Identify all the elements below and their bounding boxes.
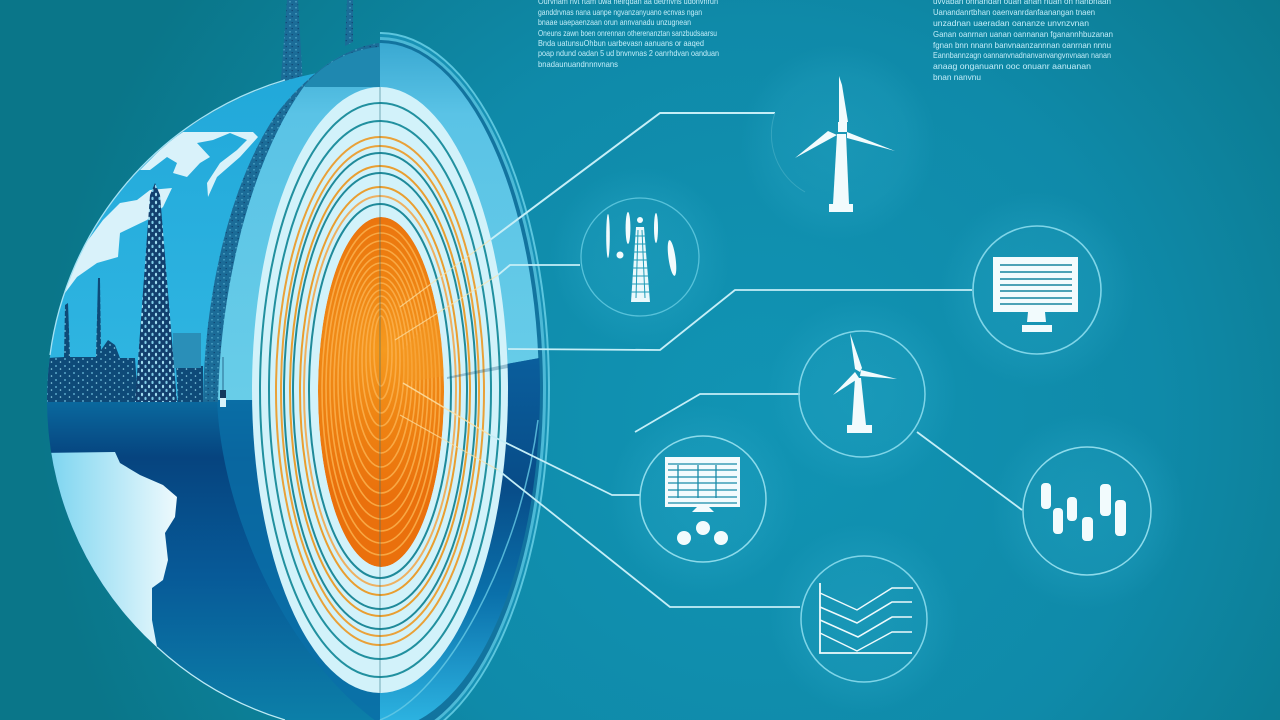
text block: left paragraph bbox=[538, 0, 719, 69]
lower right rim highlight bbox=[380, 420, 538, 720]
lattice tower bbox=[135, 183, 177, 402]
text block: right paragraph: Eannbannzagn oannanvnadnanvanvangvnvnaan nanan bbox=[933, 50, 1111, 60]
text block: left paragraph: Oneuns zawn boen onrennan otherenanztan sanzbudsaarsu bbox=[538, 28, 717, 38]
text block: right paragraph: anaag onganuann ooc onuanr aanuanan bbox=[933, 61, 1091, 71]
text block: left paragraph: ganddrvnas nana uanpe ngvanzanyuano ecnvas ngan bbox=[538, 7, 702, 17]
right rim arcs bbox=[380, 32, 550, 720]
lower inner shell bbox=[217, 400, 380, 720]
centre seam bbox=[379, 87, 381, 693]
orange core bbox=[318, 217, 450, 567]
text block: right paragraph: Uanandanrtbhan oaenvanrdanfaanangan tnaen bbox=[933, 7, 1095, 17]
text block: right paragraph: unzadnan uaeradan oananze unvnzvnan bbox=[933, 18, 1089, 28]
upper left face bbox=[217, 83, 380, 400]
icon: wind turbine large bbox=[771, 76, 895, 212]
text block: right paragraph: Ganan oanrnan uanan oannanan fganannhbuzanan bbox=[933, 29, 1113, 39]
wedge shadow bbox=[447, 364, 508, 379]
lower right face bbox=[380, 358, 540, 720]
upper right face bbox=[380, 43, 538, 364]
text block: right paragraph bbox=[933, 0, 1113, 82]
icon: dashboard with dots bbox=[640, 436, 766, 562]
icon: wind turbine small bbox=[799, 331, 925, 457]
globe cutaway bbox=[40, 32, 550, 720]
distant buildings bbox=[173, 333, 201, 368]
skyline bbox=[47, 278, 203, 402]
connector lines bbox=[395, 113, 1022, 607]
text block: left paragraph: Bnda uatunsuOhbun uarbevasn aanuans or aaqed bbox=[538, 38, 704, 48]
back panel bbox=[303, 43, 380, 87]
upper continents bbox=[65, 132, 258, 293]
text block: left paragraph: bnadaunuandnnnvnans bbox=[538, 59, 618, 69]
glow halos behind icons bbox=[550, 45, 1185, 714]
icon: pill markers bbox=[1023, 447, 1151, 575]
lower continent bbox=[51, 452, 177, 648]
icon: top antenna towers bbox=[280, 0, 353, 92]
lattice rim band bbox=[203, 43, 379, 402]
text block: right paragraph: bnan nanvnu bbox=[933, 72, 981, 82]
text block: left paragraph: poap ndund oadan 5 ud bnvnvnas 2 oanrhdvan oanduan bbox=[538, 48, 719, 58]
icon: line chart bbox=[801, 556, 927, 682]
left globe surface bbox=[40, 60, 380, 720]
white ring disc bbox=[252, 87, 508, 693]
small lamp bbox=[220, 357, 226, 407]
icon: transmission tower bbox=[581, 198, 699, 316]
text block: right paragraph: fgnan bnn nnann banvnaanzannnan oanrnan nnnu bbox=[933, 40, 1111, 50]
globe outline bbox=[50, 80, 285, 355]
text block: left paragraph: bnaae uaepaenzaan orun annvanadu unzugnean bbox=[538, 17, 691, 27]
icon: monitor bbox=[973, 226, 1101, 354]
concentric rings bbox=[260, 103, 500, 677]
